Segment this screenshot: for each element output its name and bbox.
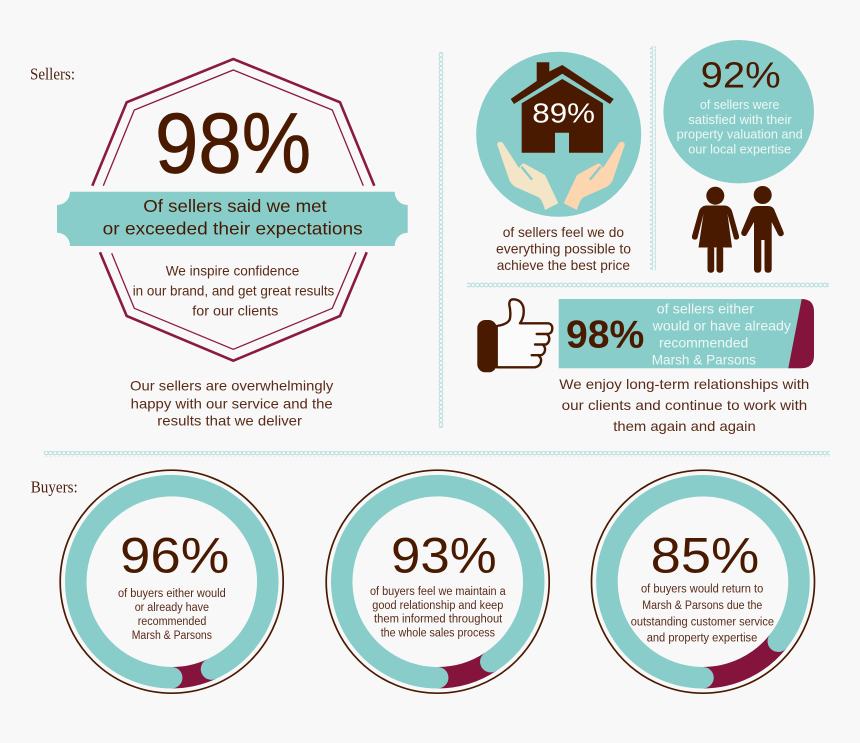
panel: 85% buyers <box>592 470 814 693</box>
outer ring <box>326 470 549 693</box>
ribbon text: or exceeded their expectations <box>103 218 363 238</box>
circle text: of sellers were <box>700 98 779 112</box>
description: outstanding customer service <box>631 617 774 629</box>
icon: thumbs up <box>477 299 552 372</box>
icon: left hand <box>497 142 558 210</box>
heading: Buyers: Buyers: <box>31 478 78 497</box>
teal progress ring <box>607 486 799 678</box>
caption: of sellers feel we do <box>503 224 624 240</box>
text block: sellers summary: results that we deliver <box>157 413 302 429</box>
panel: 98% recommended <box>477 299 814 434</box>
description <box>370 586 506 640</box>
panel: 98% badge <box>57 59 408 361</box>
crimson segment <box>172 669 212 678</box>
description: recommended <box>138 616 206 628</box>
caption: our clients and continue to work with <box>562 397 807 413</box>
badge caption: We inspire confidence <box>166 262 300 278</box>
percentage: 89% <box>532 97 595 128</box>
caption: We enjoy long-term relationships with <box>559 376 809 392</box>
big percentage: 98% <box>155 97 311 192</box>
circle text: property valuation and <box>677 128 803 142</box>
badge caption <box>133 262 334 318</box>
percentage: 85% <box>651 527 759 583</box>
description <box>631 583 774 645</box>
icon: house <box>511 62 614 153</box>
percentage: 98% <box>566 314 644 357</box>
percentage: 92% <box>701 54 781 95</box>
teal progress ring <box>76 486 268 678</box>
bar text: recommended <box>659 334 748 350</box>
text block: sellers summary <box>130 378 333 429</box>
description: Marsh & Parsons due the <box>642 600 762 612</box>
heading: Sellers: Sellers: <box>30 64 75 83</box>
outer ring <box>592 470 814 693</box>
caption <box>496 224 631 273</box>
circle text: our local expertise <box>688 142 791 156</box>
icon: right hand <box>564 142 625 210</box>
description: of buyers either would <box>118 588 226 600</box>
bar text: would or have already <box>652 318 791 334</box>
panel: 89% house in hands <box>476 52 641 273</box>
outer ring <box>60 470 283 693</box>
bar text: Marsh & Parsons <box>652 351 756 367</box>
description: and property expertise <box>647 633 757 645</box>
description: the whole sales process <box>381 628 495 640</box>
crimson segment <box>703 641 778 678</box>
bar text <box>652 300 791 367</box>
teal circle <box>663 40 814 183</box>
description: good relationship and keep <box>372 600 503 612</box>
panel: 92% satisfied <box>663 40 814 273</box>
circle text: satisfied with their <box>688 113 792 127</box>
caption: them again and again <box>613 418 756 434</box>
description: Marsh & Parsons <box>132 630 212 642</box>
description: or already have <box>135 602 209 614</box>
circle text <box>677 98 803 156</box>
ribbon banner <box>57 192 408 246</box>
teal bar <box>559 299 814 368</box>
description: of buyers would return to <box>641 583 763 595</box>
badge caption: for our clients <box>192 302 278 318</box>
description <box>118 588 226 642</box>
octagon frame top <box>92 59 374 186</box>
description: them informed throughout <box>374 614 503 626</box>
caption <box>559 376 809 434</box>
icon: man <box>741 186 784 273</box>
icon: woman <box>692 187 739 273</box>
badge caption: in our brand, and get great results <box>133 282 334 298</box>
panel: 96% buyers <box>60 470 283 693</box>
panel: 93% buyers <box>326 470 549 693</box>
ribbon text <box>103 196 363 238</box>
crimson segment <box>438 662 491 678</box>
description: of buyers feel we maintain a <box>370 586 506 598</box>
text block: sellers summary: Our sellers are overwhelmingly <box>130 378 333 394</box>
text block: sellers summary: happy with our service and the <box>131 395 333 411</box>
bar text: of sellers either <box>657 300 754 316</box>
ribbon text: Of sellers said we met <box>143 196 327 216</box>
caption: achieve the best price <box>497 257 630 273</box>
caption: everything possible to <box>496 241 631 257</box>
percentage: 93% <box>391 527 497 583</box>
teal circle <box>476 52 641 217</box>
percentage: 96% <box>120 527 229 583</box>
crimson tab <box>788 299 814 368</box>
teal progress ring <box>342 486 534 678</box>
octagon frame bottom <box>100 252 367 361</box>
